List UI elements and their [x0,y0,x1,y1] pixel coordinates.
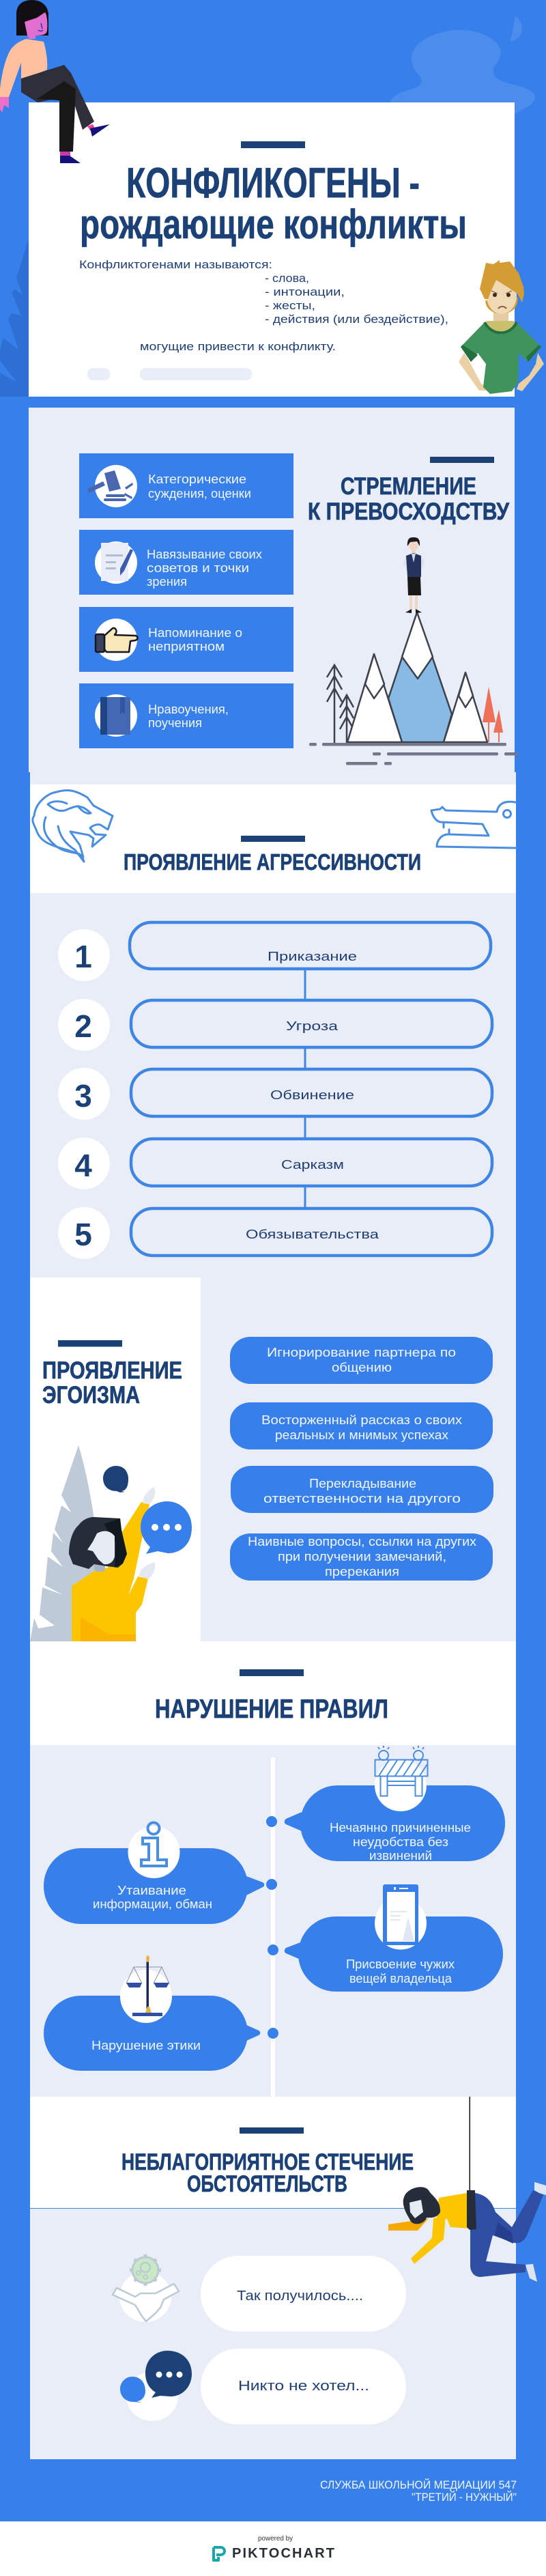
item 2 [58,999,492,1051]
intro text [79,258,448,353]
piktochart credit: PIKTOCHART [232,2546,334,2561]
card: reminders [79,607,293,672]
panel: circumstances [30,2208,516,2459]
icon: barrier [375,1746,427,1796]
pill 4: при получении замечаний, [278,1550,446,1563]
pill 2 [230,1402,493,1449]
footer text: "ТРЕТИЙ - НУЖНЫЙ" [412,2491,517,2504]
title [80,160,467,247]
card: moralizing: Нравоучения, [148,703,229,716]
icon: hanging woman [388,2097,546,2282]
bubble: accidental inconvenience: извинений [369,1849,432,1863]
icon: key gate [431,802,516,848]
icon: pointing hand [96,628,138,652]
intro text: - слова, [265,272,309,285]
item 2: Угроза [286,1019,339,1033]
bubble: ethics violation: Нарушение этики [91,2039,201,2052]
heading bar [241,141,305,148]
panel: egoism left [30,1277,201,1641]
item 3: 3 [74,1078,92,1114]
pill 4: Наивные вопросы, ссылки на других [248,1535,476,1548]
bubble: concealing information: Утаивание [117,1884,186,1897]
heading bar [241,836,305,842]
bubble: appropriating belongings [285,1884,503,1992]
pill 3: Перекладывание [309,1477,416,1490]
heading: К ПРЕВОСХОДСТВУ [308,498,510,525]
card: imposing advice: советов и точки [147,561,249,575]
item 4 [58,1137,492,1189]
icon: woman raising hands [69,1487,155,1641]
pill 1: Игнорирование партнера по [267,1346,456,1359]
card: moralizing: поучения [148,716,202,730]
bubble: concealing information [44,1823,264,1924]
card: imposing advice: зрения [147,575,187,589]
item 1: 1 [74,939,92,974]
panel: striving for superiority [29,408,546,2561]
icon: pine trees [327,665,354,743]
heading [121,2149,414,2197]
card: categorical judgments: Категорические [148,472,246,486]
icon: scales [126,1955,169,2016]
title: КОНФЛИКОГЕНЫ - [126,160,420,207]
heading [42,1357,182,1409]
bubble: ethics violation [44,1955,260,2071]
panel: aggression header [30,784,516,893]
item 2: 2 [74,1008,92,1044]
pill 3 [231,1466,493,1513]
item 5 [58,1207,492,1259]
pill 2: реальных и мнимых успехах [275,1428,448,1442]
piktochart credit: powered by [258,2535,293,2543]
icon: phone [383,1884,418,1945]
pill: it just happened: Так получилось.... [237,2289,363,2304]
card: categorical judgments: суждения, оценки [148,487,251,500]
connector lines [304,970,306,1207]
icon: virus and handshake [113,2254,179,2322]
item 1: Приказание [268,950,357,963]
icon: gavel [87,470,133,501]
icon: lion [33,791,113,862]
icon: red trees [483,687,503,742]
timeline dots [266,1816,278,2039]
footer text: СЛУЖБА ШКОЛЬНОЙ МЕДИАЦИИ 547 [320,2478,517,2491]
item 4: 4 [74,1148,92,1183]
icon: plant [30,1445,96,1641]
panel: rules timeline [30,1745,516,2097]
icon: business woman [403,537,425,613]
heading bar [58,1340,122,1346]
item 5: Обязывательства [246,1228,379,1241]
pill: nobody wanted: Никто не хотел... [238,2379,369,2394]
intro text: - жесты, [265,299,315,312]
icon: speech bubbles [120,2351,192,2421]
ground lines [309,743,518,765]
pill 1: общению [332,1361,392,1374]
card: imposing advice [79,530,293,595]
item 4: Сарказм [281,1158,344,1172]
piktochart credit [214,2535,334,2561]
icon: mountains [347,612,487,742]
icon: angry man [459,260,544,394]
icon: info [141,1823,167,1866]
panel: hero [29,102,515,397]
intro text: - действия (или бездействие), [265,313,448,326]
bubble: accidental inconvenience: неудобства без [353,1835,448,1849]
item 5: 5 [74,1217,92,1252]
heading bar [240,2127,304,2134]
heading: ПРОЯВЛЕНИЕ [42,1357,182,1384]
intro text: Конфликтогенами называются: [79,258,272,271]
panel: egoism list [201,1277,516,1641]
card: reminders: неприятном [148,640,225,653]
intro text: могущие привести к конфликту. [140,340,336,353]
card: imposing advice: Навязывание своих [147,548,262,561]
pill: nobody wanted [201,2349,406,2424]
footer text [320,2478,517,2504]
icon: note and pen [101,543,133,581]
item 1 [58,922,491,981]
icon: book [100,697,130,735]
card: moralizing [79,683,293,748]
heading: СТРЕМЛЕНИЕ [341,473,476,500]
icon: piktochart logo [214,2547,225,2560]
heading: ОБСТОЯТЕЛЬСТВ [187,2171,347,2197]
card: categorical judgments [79,453,293,518]
pill 4: пререкания [325,1565,399,1579]
icon: sitting woman [0,0,110,163]
heading bar [240,1669,304,1676]
bubble: appropriating belongings: Присвоение чужих [346,1957,455,1971]
decorative pills [87,368,252,380]
heading: НАРУШЕНИЕ ПРАВИЛ [155,1695,388,1724]
pill: it just happened [201,2256,406,2332]
item 3 [58,1068,492,1120]
footer strip [0,2521,546,2576]
bubble: accidental inconvenience [285,1746,505,1863]
card: reminders: Напоминание о [148,626,242,640]
panel: aggression list [30,893,516,1277]
panel: rules header [30,1641,516,1745]
heading: НЕБЛАГОПРИЯТНОЕ СТЕЧЕНИЕ [121,2149,414,2175]
pill 2: Восторженный рассказ о своих [261,1413,462,1427]
heading [308,473,510,525]
bubble: accidental inconvenience: Нечаянно причиненные [330,1821,471,1835]
bubble: concealing information: информации, обман [93,1897,212,1911]
heading: ПРОЯВЛЕНИЕ АГРЕССИВНОСТИ [124,849,421,875]
decorative leaf left [0,239,29,397]
item 3: Обвинение [270,1088,354,1102]
panel: circumstances header [30,2097,516,2208]
heading: ЭГОИЗМА [42,1382,140,1409]
timeline line [271,1757,275,2097]
heading bar [430,457,494,463]
intro text: - интонации, [265,285,345,298]
icon: navy bubble [103,1466,128,1492]
illustration: mountains and woman [309,537,518,765]
decorative blob top right [390,16,535,115]
icon: blue speech bubble [141,1501,192,1554]
bubble: appropriating belongings: вещей владельца [349,1972,452,1985]
pill 3: ответственности на другого [263,1492,461,1505]
pill 1 [230,1337,493,1384]
pill 4 [230,1533,493,1581]
